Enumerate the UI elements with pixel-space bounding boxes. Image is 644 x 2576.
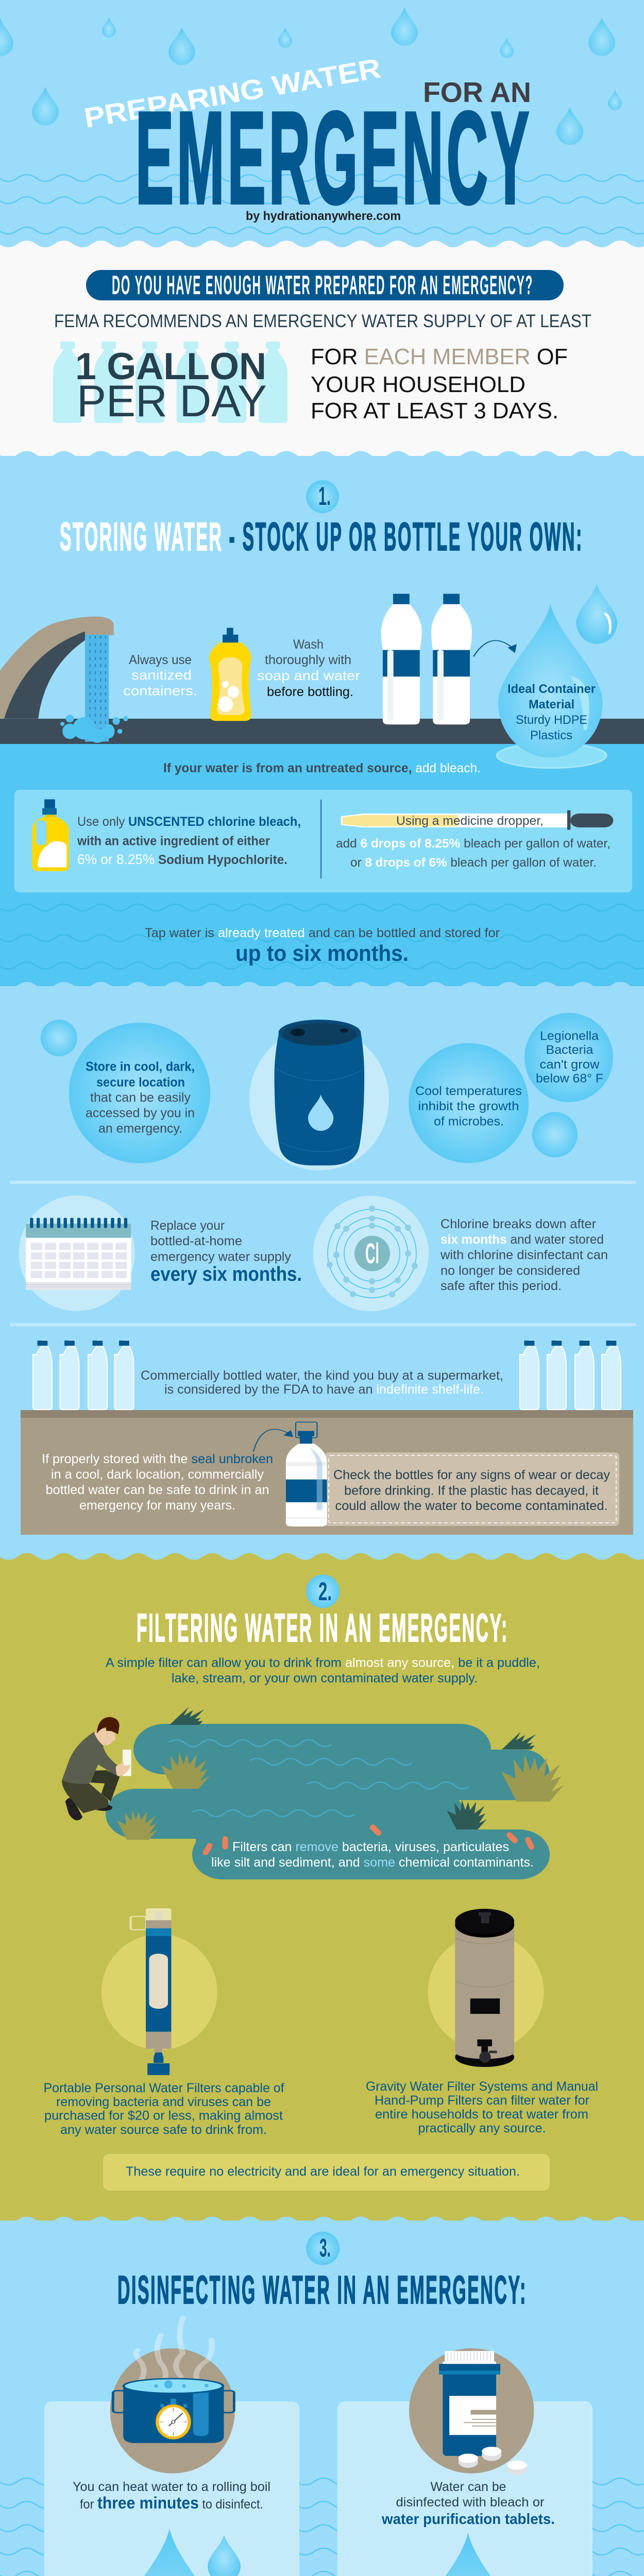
section 1 number badge bbox=[306, 480, 339, 513]
panel: storage shelf bbox=[21, 1410, 633, 1535]
circle: legionella bacteria bbox=[524, 1013, 613, 1157]
callout: check the bottles: Check the bottles for any signs of wear or decay bbox=[333, 1468, 610, 1482]
callout: do not boil drop bbox=[106, 2528, 241, 2576]
each member text: FOR EACH MEMBER OF bbox=[311, 344, 568, 369]
text: water can be disinfected bbox=[381, 2480, 555, 2528]
text: what filters remove: Filters can remove bacteria, viruses, particulates bbox=[232, 1840, 509, 1854]
text: seal unbroken bbox=[42, 1452, 273, 1513]
callout: check the bottles: before drinking. If the plastic has decayed, it bbox=[344, 1484, 599, 1498]
section 2 number badge: 2. bbox=[318, 1577, 332, 1606]
text: water can be disinfected: Water can be bbox=[431, 2480, 506, 2494]
callout: ideal container material drop: Sturdy HDPE bbox=[516, 713, 587, 727]
text: replace every six months: bottled-at-home bbox=[150, 1234, 242, 1248]
text: unscented bleach: 6% or 8.25% Sodium Hypochlorite. bbox=[77, 852, 287, 867]
each member text: FOR AT LEAST 3 DAYS. bbox=[311, 398, 558, 423]
circle: legionella bacteria: Legionella bbox=[540, 1029, 599, 1043]
text: gravity filter description: practically any source. bbox=[418, 2121, 546, 2136]
title bbox=[82, 53, 532, 231]
panel: disinfecting tablets bbox=[337, 2348, 592, 2576]
circle: store in cool dark location: secure location bbox=[96, 1075, 185, 1090]
one gallon per day with bottle icons bbox=[53, 342, 287, 426]
text: chlorine breaks down bbox=[440, 1217, 608, 1293]
callout: bleach expires drop bbox=[404, 2532, 562, 2576]
text: filter intro: lake, stream, or your own contaminated water supply. bbox=[172, 1671, 478, 1686]
text: add bleach: If your water is from an untreated source, add bleach. bbox=[163, 761, 481, 775]
text: unscented bleach: with an active ingredient of either bbox=[77, 834, 270, 848]
icon: person collecting water bbox=[62, 1717, 131, 1820]
text: what filters remove bbox=[211, 1840, 534, 1870]
text: heat water bbox=[73, 2480, 270, 2512]
text: tap water six months: Tap water is already treated and can be bottled and stored for bbox=[145, 926, 500, 940]
icon: faucet with running water bbox=[0, 617, 128, 743]
icon: purification tablets bottle bbox=[409, 2348, 534, 2475]
icon: blue water barrel bbox=[249, 1020, 389, 1171]
text: portable filter description: Portable Personal Water Filters capable of bbox=[43, 2081, 284, 2095]
icon: bottle row left bbox=[33, 1341, 134, 1410]
text: portable filter description: any water source safe to drink from. bbox=[60, 2123, 267, 2137]
illustration: pond with grass bbox=[106, 1707, 564, 1879]
text: sanitized containers: containers. bbox=[123, 683, 197, 699]
each member text: YOUR HOUSEHOLD bbox=[311, 372, 526, 397]
panel: bleach instructions bbox=[14, 790, 632, 892]
each member text bbox=[311, 344, 568, 423]
icon: portable personal water filter bbox=[101, 1908, 217, 2075]
circle: store in cool dark location: accessed by you in bbox=[86, 1106, 195, 1120]
icon: medicine dropper bbox=[341, 810, 613, 830]
text: sanitized containers bbox=[123, 653, 197, 699]
title: FOR AN bbox=[423, 76, 531, 108]
icon: yellow soap bottle bbox=[209, 628, 251, 721]
text: replace every six months: every six months. bbox=[150, 1263, 302, 1285]
callout: no electricity: These require no electricity and are ideal for an emergency situation. bbox=[126, 2164, 520, 2179]
icon: chlorine atom bbox=[313, 1196, 429, 1311]
text: gravity filter description: Hand-Pump Filters can filter water for bbox=[375, 2093, 589, 2108]
text: sanitized containers: Always use bbox=[129, 653, 192, 667]
callout: ideal container material drop bbox=[497, 583, 617, 768]
text: gravity filter description: Gravity Water Filter Systems and Manual bbox=[366, 2079, 598, 2094]
text: wash before bottling bbox=[257, 637, 360, 699]
text: heat water: You can heat water to a rolling boil bbox=[73, 2480, 270, 2494]
icon: calendar bbox=[19, 1195, 135, 1311]
circle: cool temperatures: inhibit the growth bbox=[418, 1099, 519, 1113]
text: commercially bottled water bbox=[141, 1368, 503, 1397]
one gallon per day with bottle icons: PER DAY bbox=[77, 377, 267, 426]
circle: store in cool dark location bbox=[41, 1020, 210, 1163]
text: chlorine breaks down: no longer be considered bbox=[440, 1263, 580, 1278]
callout: ideal container material drop: Ideal Container bbox=[507, 682, 596, 696]
circle: legionella bacteria: can't grow bbox=[540, 1058, 600, 1072]
text: seal unbroken: emergency for many years. bbox=[79, 1498, 235, 1513]
text: wash before bottling: Wash bbox=[293, 637, 324, 652]
text: seal unbroken: in a cool, dark location, commercially bbox=[51, 1467, 264, 1482]
circle: legionella bacteria: Bacteria bbox=[546, 1043, 594, 1057]
circle: store in cool dark location: that can be easily bbox=[90, 1091, 191, 1105]
callout: ideal container material drop: Material bbox=[529, 698, 574, 711]
callout: no electricity bbox=[103, 2154, 550, 2191]
text: portable filter description: purchased for $20 or less, making almost bbox=[44, 2109, 283, 2123]
text: dropper dosage: or 8 drops of 6% bleach per gallon of water. bbox=[350, 856, 597, 870]
callout: check the bottles bbox=[325, 1452, 619, 1526]
circle: store in cool dark location: Store in cool, dark, bbox=[86, 1059, 195, 1074]
circle: cool temperatures: of microbes. bbox=[434, 1115, 504, 1129]
text: replace every six months: Replace your bbox=[150, 1218, 225, 1233]
text: chlorine breaks down: with chlorine disinfectant can bbox=[440, 1248, 608, 1262]
text: dropper dosage: Using a medicine dropper, bbox=[396, 814, 544, 828]
icon: gravity water filter bbox=[428, 1909, 544, 2067]
section 3 number badge: 3. bbox=[319, 2233, 331, 2262]
text: wash before bottling: before bottling. bbox=[267, 685, 353, 699]
text: dropper dosage: add 6 drops of 8.25% bleach per gallon of water, bbox=[336, 837, 611, 851]
icon: two plastic bottles bbox=[381, 594, 472, 724]
arrow to container material bbox=[473, 640, 517, 656]
icon: boiling pot with stopwatch bbox=[110, 2318, 235, 2473]
circle: cool temperatures: Cool temperatures bbox=[415, 1084, 522, 1098]
text: portable filter description bbox=[43, 2081, 284, 2137]
callout: check the bottles: could allow the water to become contaminated. bbox=[335, 1499, 608, 1513]
text: portable filter description: removing bacteria and viruses can be bbox=[56, 2095, 271, 2109]
section 1 number badge: 1. bbox=[318, 482, 331, 511]
circle: legionella bacteria: below 68° F bbox=[536, 1072, 603, 1086]
text: water can be disinfected: water purification tablets. bbox=[381, 2511, 555, 2528]
title: by hydrationanywhere.com bbox=[246, 209, 401, 223]
text: unscented bleach: Use only UNSCENTED chlorine bleach, bbox=[77, 815, 301, 829]
text: commercially bottled water: is considered by the FDA to have an indefinite shelf-life. bbox=[164, 1382, 484, 1397]
text: chlorine breaks down: six months and water stored bbox=[440, 1232, 604, 1247]
text: replace every six months: emergency water supply bbox=[150, 1250, 291, 1264]
icon: bleach jug bbox=[32, 799, 69, 871]
text: replace every six months bbox=[150, 1218, 302, 1285]
text: what filters remove: like silt and sediment, and some chemical contaminants. bbox=[211, 1855, 534, 1870]
text: tap water six months bbox=[145, 926, 500, 966]
text: dropper dosage bbox=[336, 814, 611, 870]
icon: sealed bottle with arrow bbox=[253, 1422, 327, 1527]
text: unscented bleach bbox=[77, 815, 301, 867]
panel: boiling water bbox=[44, 2318, 299, 2576]
icon: bottle row right bbox=[520, 1341, 621, 1410]
text: seal unbroken: bottled water can be safe to drink in an bbox=[45, 1483, 269, 1497]
icon: chlorine atom: Cl bbox=[365, 1237, 379, 1269]
text: filter intro: A simple filter can allow you to drink from almost any source, be it a puddle, bbox=[106, 1656, 540, 1670]
text: chlorine breaks down: safe after this period. bbox=[440, 1279, 562, 1293]
text: chlorine breaks down: Chlorine breaks down after bbox=[440, 1217, 596, 1231]
text: filter intro bbox=[106, 1656, 540, 1686]
text: sanitized containers: sanitized bbox=[131, 667, 192, 683]
text: tap water six months: up to six months. bbox=[235, 941, 409, 966]
counter top bbox=[0, 719, 644, 744]
text: gravity filter description bbox=[366, 2079, 598, 2136]
circle: cool temperatures bbox=[409, 1043, 529, 1163]
FEMA recommendation line: FEMA RECOMMENDS AN EMERGENCY WATER SUPPLY OF AT LEAST bbox=[54, 311, 591, 331]
section 3 number badge bbox=[306, 2232, 340, 2265]
circle: store in cool dark location: an emergency. bbox=[98, 1121, 182, 1136]
text: wash before bottling: soap and water bbox=[257, 668, 360, 683]
title: PREPARING WATER bbox=[82, 53, 383, 134]
one gallon per day with bottle icons: 1 GALLON bbox=[75, 346, 266, 387]
section 2 number badge bbox=[306, 1574, 340, 1608]
text: heat water: for three minutes to disinfect. bbox=[80, 2494, 263, 2512]
text: commercially bottled water: Commercially bottled water, the kind you buy at a supermarket, bbox=[141, 1368, 503, 1383]
text: gravity filter description: entire households to treat water from bbox=[375, 2107, 588, 2122]
callout: ideal container material drop: Plastics bbox=[530, 728, 572, 742]
header: falling water drops bbox=[0, 7, 622, 145]
text: seal unbroken: If properly stored with the seal unbroken bbox=[42, 1452, 273, 1466]
text: water can be disinfected: disinfected with bleach or bbox=[396, 2495, 544, 2510]
text: wash before bottling: thoroughly with bbox=[265, 653, 351, 667]
